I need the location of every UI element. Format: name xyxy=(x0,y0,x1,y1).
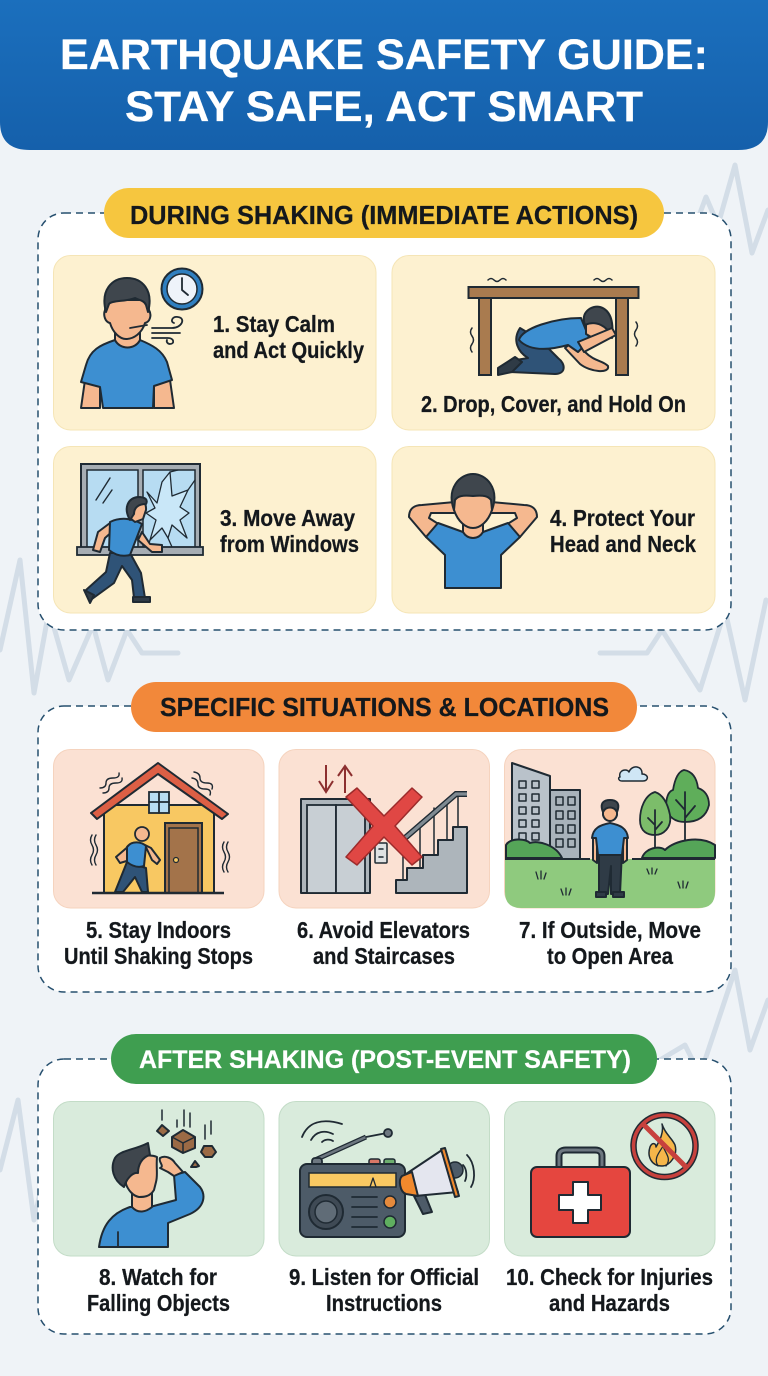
label xyxy=(213,311,364,363)
label: 9. Listen for Official xyxy=(289,1264,479,1290)
label: from Windows xyxy=(220,531,359,557)
label: 5. Stay Indoors xyxy=(86,917,231,943)
icon: crossed elevator and stairs xyxy=(301,765,467,893)
icon: calm person with clock xyxy=(81,268,202,408)
label: 4. Protect Your xyxy=(550,505,695,531)
header banner xyxy=(0,0,768,150)
card 9: official instructions xyxy=(279,1102,490,1316)
label xyxy=(220,505,359,557)
card 4: protect head and neck xyxy=(392,446,715,613)
heading: specific situations: SPECIFIC SITUATIONS & LOCATIONS xyxy=(160,692,609,722)
label: 6. Avoid Elevators xyxy=(297,917,470,943)
label: and Staircases xyxy=(313,943,455,969)
card 6: avoid elevators and stairs xyxy=(279,750,490,969)
label: 10. Check for Injuries xyxy=(506,1264,713,1290)
heading: specific situations xyxy=(131,682,637,732)
icon: person in open park xyxy=(505,763,715,908)
heading: after shaking: AFTER SHAKING (POST-EVENT SAFETY) xyxy=(139,1046,631,1074)
label xyxy=(519,917,701,969)
heading: after shaking xyxy=(111,1034,657,1084)
card 7: move to open area xyxy=(504,750,715,969)
icon: first aid kit and no fire sign xyxy=(531,1112,698,1237)
panel: after shaking xyxy=(38,1034,731,1334)
label: 1. Stay Calm xyxy=(213,311,335,337)
heading: during shaking: DURING SHAKING (IMMEDIATE ACTIONS) xyxy=(130,200,638,230)
panel: during shaking xyxy=(38,188,731,630)
card 8: falling objects xyxy=(54,1102,264,1316)
label xyxy=(297,917,470,969)
card 10: injuries and hazards xyxy=(504,1102,715,1316)
icon: radio and megaphone xyxy=(300,1121,474,1237)
label: and Hazards xyxy=(549,1290,670,1316)
label xyxy=(64,917,253,969)
icon: shaking house xyxy=(90,763,230,893)
card 3: move away from windows xyxy=(54,446,376,613)
card 2: drop cover hold on xyxy=(392,256,715,430)
label: 3. Move Away xyxy=(220,505,355,531)
title: EARTHQUAKE SAFETY GUIDE: xyxy=(60,31,708,79)
icon: person covering neck xyxy=(409,474,537,588)
title xyxy=(60,31,708,131)
icon: person under table xyxy=(468,278,638,375)
label xyxy=(550,505,696,557)
label: to Open Area xyxy=(547,943,673,969)
label: 2. Drop, Cover, and Hold On xyxy=(421,391,686,417)
title: STAY SAFE, ACT SMART xyxy=(125,83,643,131)
label: Until Shaking Stops xyxy=(64,943,253,969)
card 1: stay calm xyxy=(54,256,376,430)
label: and Act Quickly xyxy=(213,337,364,363)
icon: person watching falling debris xyxy=(99,1110,216,1247)
icon: person leaving broken window xyxy=(77,464,203,603)
label xyxy=(87,1264,230,1316)
heading: during shaking xyxy=(104,188,664,238)
label: 8. Watch for xyxy=(99,1264,217,1290)
label: Falling Objects xyxy=(87,1290,230,1316)
label: 7. If Outside, Move xyxy=(519,917,701,943)
label xyxy=(289,1264,479,1316)
card 5: stay indoors xyxy=(54,750,264,969)
label: Instructions xyxy=(326,1290,442,1316)
label: Head and Neck xyxy=(550,531,696,557)
panel: specific situations xyxy=(38,682,731,992)
label xyxy=(506,1264,713,1316)
